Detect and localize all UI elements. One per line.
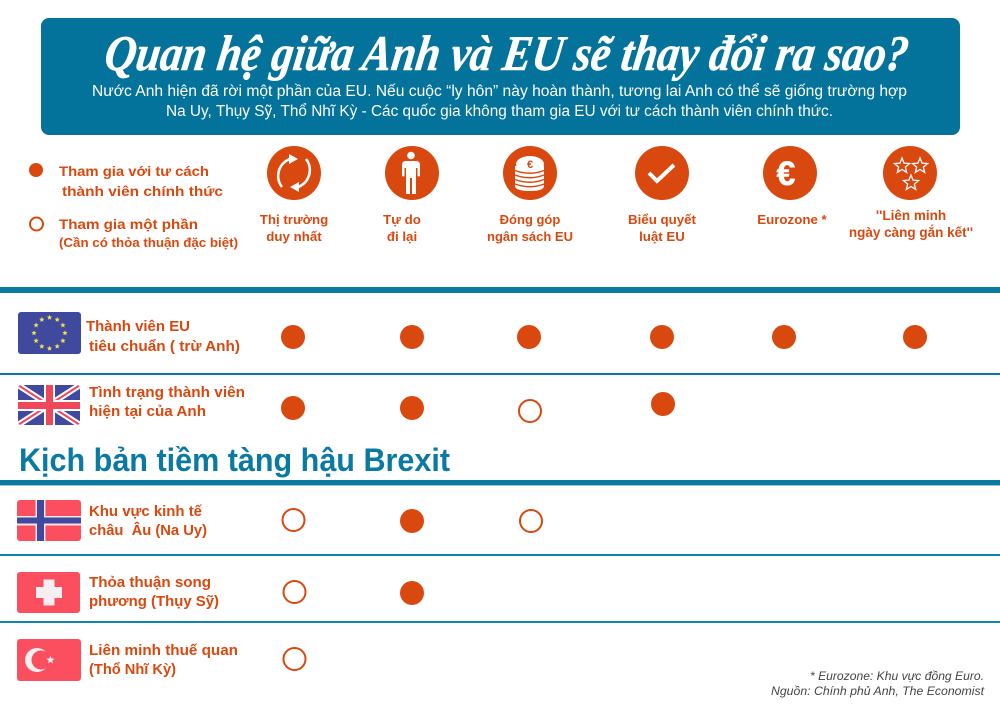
column label: budget: ngân sách EU [487, 229, 573, 244]
membership dots [284, 581, 424, 605]
flag: EU [18, 312, 81, 354]
row label [89, 503, 207, 539]
row label: châu Âu (Na Uy) [89, 521, 207, 539]
column label: single market: duy nhất [266, 229, 322, 244]
flag: Norway [17, 500, 81, 541]
footnote and source: * Eurozone: Khu vực đồng Euro. [810, 669, 984, 683]
icon: single market [267, 146, 321, 200]
row: customs union Turkey [17, 639, 306, 681]
column label: budget: Đóng góp [500, 212, 560, 227]
column label: single market [260, 212, 328, 244]
legend: full membership [29, 163, 223, 199]
row label: Thỏa thuận song [89, 574, 211, 591]
column label: vote: luật EU [639, 229, 685, 244]
column label: vote [628, 212, 697, 244]
icon: euro [763, 146, 817, 200]
header banner [41, 18, 960, 135]
row label: hiện tại của Anh [89, 403, 206, 420]
row: standard EU member [18, 312, 927, 355]
column label: free movement: Tự do [383, 212, 421, 227]
row label [89, 574, 219, 610]
legend: full membership: Tham gia với tư cách [59, 163, 209, 179]
row label: Khu vực kinh tế [89, 503, 203, 520]
column label: free movement: đi lại [387, 229, 417, 244]
column label: free movement [383, 212, 421, 244]
column label: eurozone: Eurozone * [757, 212, 828, 227]
flag: Switzerland [17, 572, 80, 613]
legend [29, 163, 238, 250]
intro text [92, 83, 907, 120]
row label [89, 642, 238, 678]
section heading: Kịch bản tiềm tàng hậu Brexit [19, 442, 450, 478]
intro text: Nước Anh hiện đã rời một phần của EU. Nếu cuộc “ly hôn” này hoàn thành, tương lai Anh có thể sẽ giống trường hợp [92, 83, 907, 100]
column label: ever closer union: ''Liên minh [876, 208, 946, 223]
row label: (Thổ Nhĩ Kỳ) [89, 661, 176, 678]
row label: Liên minh thuế quan [89, 642, 238, 659]
row label: Thành viên EU [86, 318, 190, 335]
footnote and source [771, 669, 985, 698]
row label: Tình trạng thành viên [89, 384, 245, 401]
footnote and source: Nguồn: Chính phủ Anh, The Economist [771, 684, 985, 698]
column label: single market: Thị trường [260, 212, 328, 227]
membership dots [282, 509, 542, 533]
icon: free movement [385, 146, 439, 200]
column label: budget [487, 212, 573, 244]
column label: vote: Biểu quyết [628, 212, 697, 227]
row label: phương (Thụy Sỹ) [89, 593, 219, 610]
icon: EU budget coins [503, 146, 557, 200]
row: current UK status [18, 384, 675, 425]
icon: three stars [883, 146, 937, 200]
row: EEA Norway [17, 500, 542, 541]
membership dots [281, 325, 927, 349]
legend: partial membership: Tham gia một phần [59, 216, 198, 232]
icon: voting check mark [635, 146, 689, 200]
flag: Turkey [17, 639, 81, 681]
column label: ever closer union [849, 208, 973, 240]
flag: UK [18, 385, 80, 425]
membership dot [284, 648, 306, 670]
row label: tiêu chuẩn ( trừ Anh) [89, 338, 240, 355]
legend: partial membership [30, 216, 238, 250]
legend: full membership: thành viên chính thức [62, 183, 223, 199]
column label: ever closer union: ngày càng gắn kết'' [849, 225, 973, 240]
icon: EU budget coins: € [527, 159, 533, 171]
membership dots [281, 392, 675, 422]
legend: partial membership: (Cần có thỏa thuận đặc biệt) [59, 236, 238, 250]
row: bilateral Switzerland [17, 572, 424, 613]
icon: euro: € [777, 155, 796, 193]
intro text: Na Uy, Thụy Sỹ, Thổ Nhĩ Kỳ - Các quốc gia không tham gia EU với tư cách thành viên chính thức. [166, 103, 833, 120]
row label [89, 384, 245, 420]
row label [86, 318, 240, 355]
